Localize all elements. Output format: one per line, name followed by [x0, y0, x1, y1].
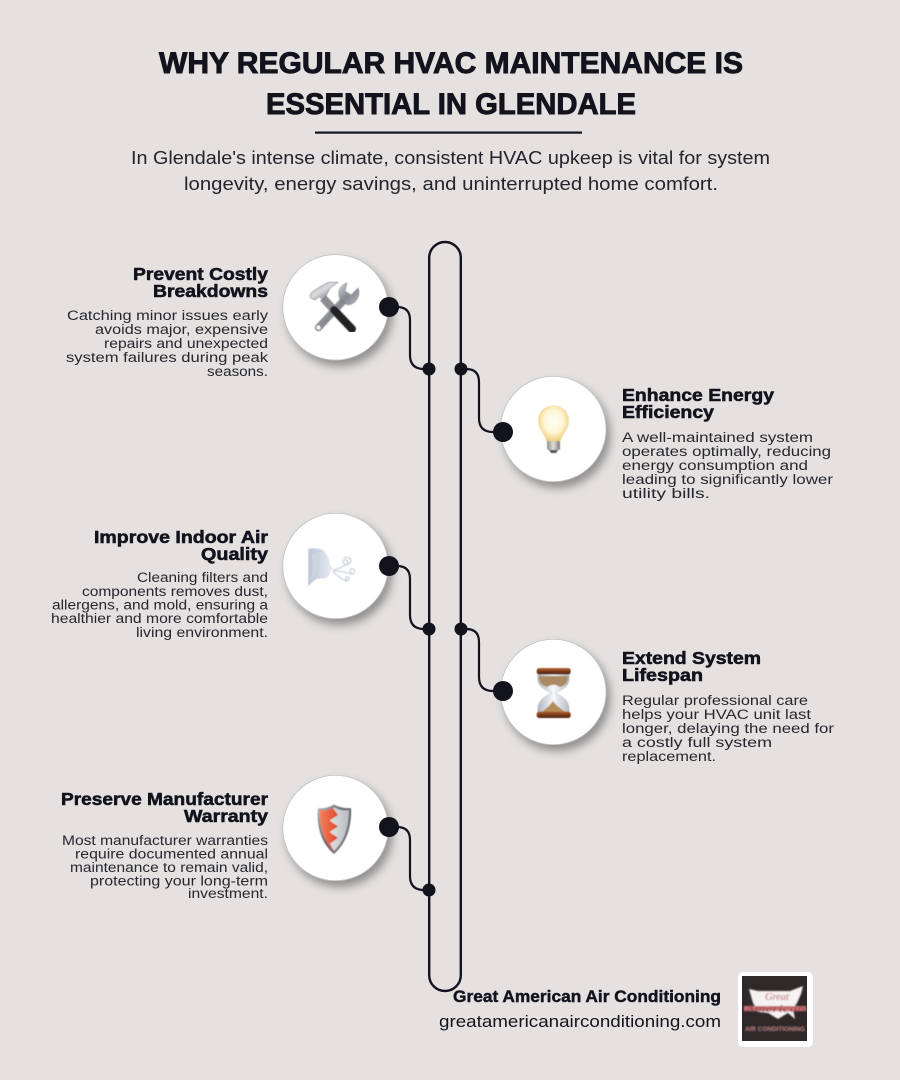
footer: company name and url: Great American Air Conditioning — [453, 987, 721, 1006]
text block: a costly full system — [622, 735, 772, 751]
icon: face blowing air — [308, 549, 355, 586]
heading — [133, 264, 268, 301]
text block — [622, 430, 833, 502]
text block: Cleaning filters and — [137, 570, 268, 586]
connector: air quality — [389, 566, 436, 636]
text block: Regular professional care — [622, 693, 808, 709]
text block: healthier and more comfortable — [51, 611, 268, 627]
icon circle: light bulb — [501, 376, 606, 482]
text block: require documented annual — [75, 846, 268, 862]
text block: energy consumption and — [622, 458, 808, 474]
connector: energy efficiency — [454, 362, 503, 432]
heading: Lifespan — [622, 665, 703, 685]
panel: improve indoor air quality — [51, 513, 399, 641]
title underline — [315, 132, 582, 134]
heading: Quality — [201, 544, 268, 564]
footer: logo: Great — [765, 991, 790, 1003]
heading: Breakdowns — [153, 281, 268, 301]
text block: A well-maintained system — [622, 430, 813, 446]
icon circle: hourglass — [501, 639, 606, 745]
icon: shield — [318, 804, 351, 854]
heading: Warranty — [184, 806, 268, 826]
text block: replacement. — [622, 749, 716, 765]
heading — [94, 527, 268, 564]
heading — [622, 648, 761, 685]
text block: helps your HVAC unit last — [622, 707, 811, 723]
heading: Extend System — [622, 648, 761, 668]
text block: utility bills. — [622, 486, 710, 502]
central timeline track — [429, 242, 461, 991]
heading: Efficiency — [622, 402, 714, 422]
icon: hammer and wrench — [310, 282, 359, 330]
panel: prevent costly breakdowns — [66, 255, 399, 380]
heading: Enhance Energy — [622, 385, 774, 405]
text block: Catching minor issues early — [67, 308, 269, 324]
text block — [622, 693, 834, 765]
footer: logo — [738, 972, 813, 1047]
title: ESSENTIAL IN GLENDALE — [266, 88, 636, 121]
text block: operates optimally, reducing — [622, 444, 831, 460]
text block — [62, 833, 268, 902]
text block: maintenance to remain valid, — [70, 860, 268, 876]
icon circle: shield — [283, 775, 388, 881]
panel: extend system lifespan — [493, 639, 834, 765]
text block: leading to significantly lower — [622, 472, 833, 488]
subtitle: In Glendale's intense climate, consistent HVAC upkeep is vital for system — [131, 148, 770, 168]
node dot — [379, 817, 399, 837]
text block: avoids major, expensive — [95, 322, 268, 338]
node dot — [379, 556, 399, 576]
footer: company name and url: greatamericanairconditioning.com — [439, 1012, 721, 1031]
connector: system lifespan — [454, 622, 503, 691]
text block: protecting your long-term — [90, 874, 268, 890]
panel: enhance energy efficiency — [493, 376, 833, 502]
icon: light bulb — [538, 406, 568, 453]
heading: Preserve Manufacturer — [61, 789, 268, 809]
text block — [51, 570, 268, 641]
text block: living environment. — [136, 625, 268, 641]
text block: system failures during peak — [66, 350, 269, 366]
footer: logo: American — [743, 1004, 805, 1015]
footer: company name and url — [439, 987, 721, 1031]
panel: preserve manufacturer warranty — [61, 775, 399, 902]
title — [159, 47, 743, 121]
text block: seasons. — [207, 364, 268, 380]
icon: hourglass — [537, 668, 571, 718]
icon circle: air — [283, 513, 388, 619]
text block: Most manufacturer warranties — [62, 833, 268, 849]
heading — [61, 789, 268, 826]
text block: investment. — [188, 886, 268, 902]
title: WHY REGULAR HVAC MAINTENANCE IS — [159, 47, 743, 80]
footer: logo: AIR CONDITIONING — [745, 1027, 805, 1033]
text block — [66, 308, 269, 380]
text block: repairs and unexpected — [104, 336, 268, 352]
text block: longer, delaying the need for — [622, 721, 834, 737]
node dot — [493, 422, 513, 442]
connector: warranty — [389, 827, 436, 896]
subtitle: longevity, energy savings, and uninterrupted home comfort. — [184, 174, 718, 194]
node dot — [379, 297, 399, 317]
icon circle: tools — [283, 255, 388, 360]
text block: components removes dust, — [82, 584, 268, 600]
connector: prevent breakdowns — [389, 307, 436, 376]
heading: Prevent Costly — [133, 264, 268, 284]
heading: Improve Indoor Air — [94, 527, 268, 547]
heading — [622, 385, 774, 422]
node dot — [493, 681, 513, 701]
text block: allergens, and mold, ensuring a — [52, 598, 268, 614]
subtitle — [131, 148, 770, 194]
